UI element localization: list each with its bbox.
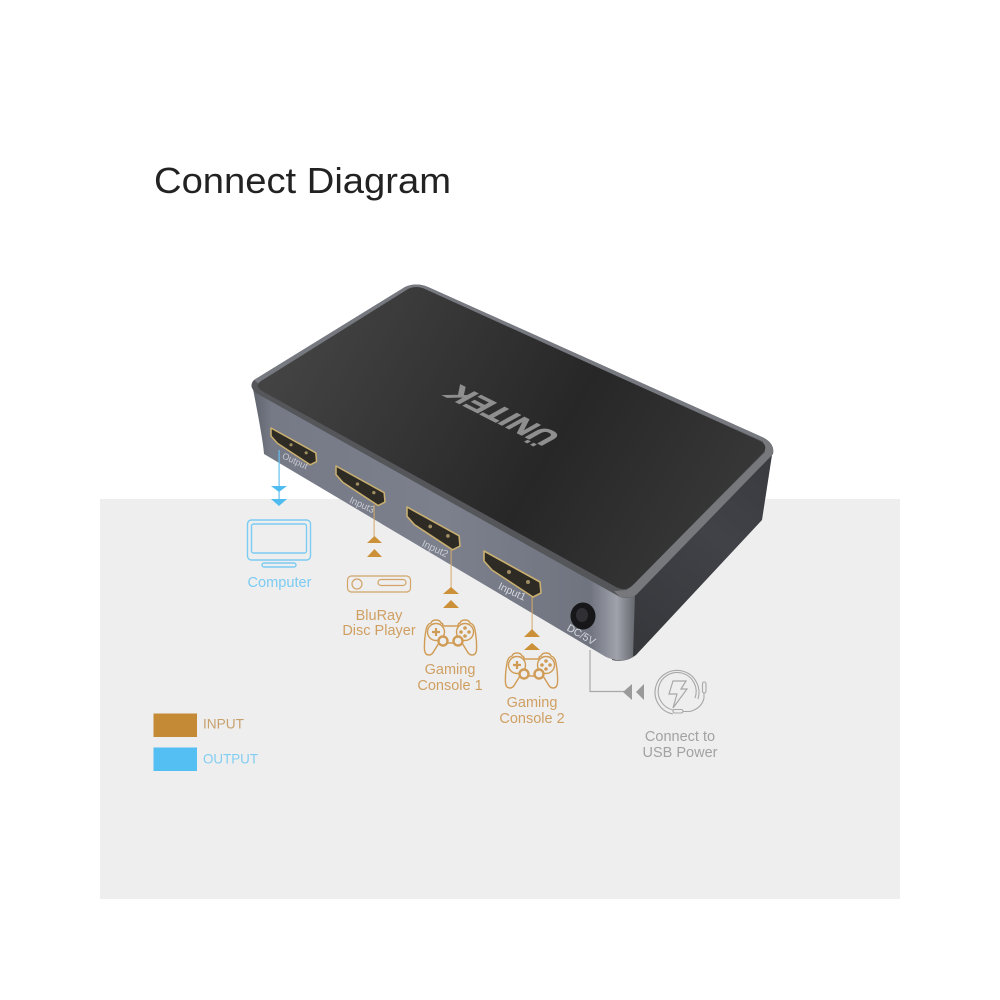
device front face [253, 389, 635, 660]
icon: USB power [655, 670, 706, 714]
device side face [612, 455, 772, 661]
port: Input3 [336, 466, 385, 506]
label: Gaming Console 2: Gaming [507, 695, 557, 711]
port label: Input1: Input1 [496, 580, 528, 604]
device top face [258, 287, 765, 589]
icon: game controller 2 [505, 653, 558, 688]
legend [154, 714, 258, 771]
device: HDMI switch [251, 284, 773, 661]
port: Input2 [407, 507, 460, 550]
icon: computer monitor [248, 520, 310, 567]
port: Input1 [484, 551, 541, 597]
connector: Input3 to BluRay [367, 505, 382, 557]
port label: Input2: Input2 [420, 539, 450, 560]
label: Connect to USB Power: Connect to [645, 729, 715, 745]
label: BluRay Disc Player: BluRay [356, 608, 403, 624]
port: Output [271, 428, 317, 465]
legend label: output: OUTPUT [203, 750, 258, 766]
icon: game controller 1 [424, 620, 477, 655]
label: Connect to USB Power: USB Power [643, 745, 718, 761]
label: BluRay Disc Player: Disc Player [342, 623, 416, 639]
label: Gaming Console 1: Gaming [425, 662, 475, 678]
logo: ÜNITEK [435, 381, 568, 450]
device frame right highlight [614, 437, 773, 598]
connector: output to computer [271, 450, 287, 506]
port label: DC/5V: DC/5V [565, 622, 597, 648]
icon: BluRay player [348, 576, 410, 592]
label: Computer: Computer [248, 575, 312, 591]
title: Connect Diagram [154, 160, 451, 201]
port label: Input3: Input3 [347, 495, 376, 516]
label: Gaming Console 2: Console 2 [499, 711, 565, 727]
label: Gaming Console 1: Console 1 [417, 678, 483, 694]
device top frame [251, 284, 773, 598]
device frame back edge [254, 284, 764, 442]
port label: Output: Output [281, 451, 310, 471]
legend label: input: INPUT [203, 716, 244, 732]
legend swatch: input [154, 714, 197, 737]
port: DC jack [570, 602, 596, 630]
connector: DC to USB power [590, 650, 644, 700]
panel: grey background [100, 499, 900, 899]
connector: Input2 to Gaming Console 1 [443, 550, 459, 608]
connector: Input1 to Gaming Console 2 [524, 597, 540, 650]
legend swatch: output [154, 748, 197, 771]
